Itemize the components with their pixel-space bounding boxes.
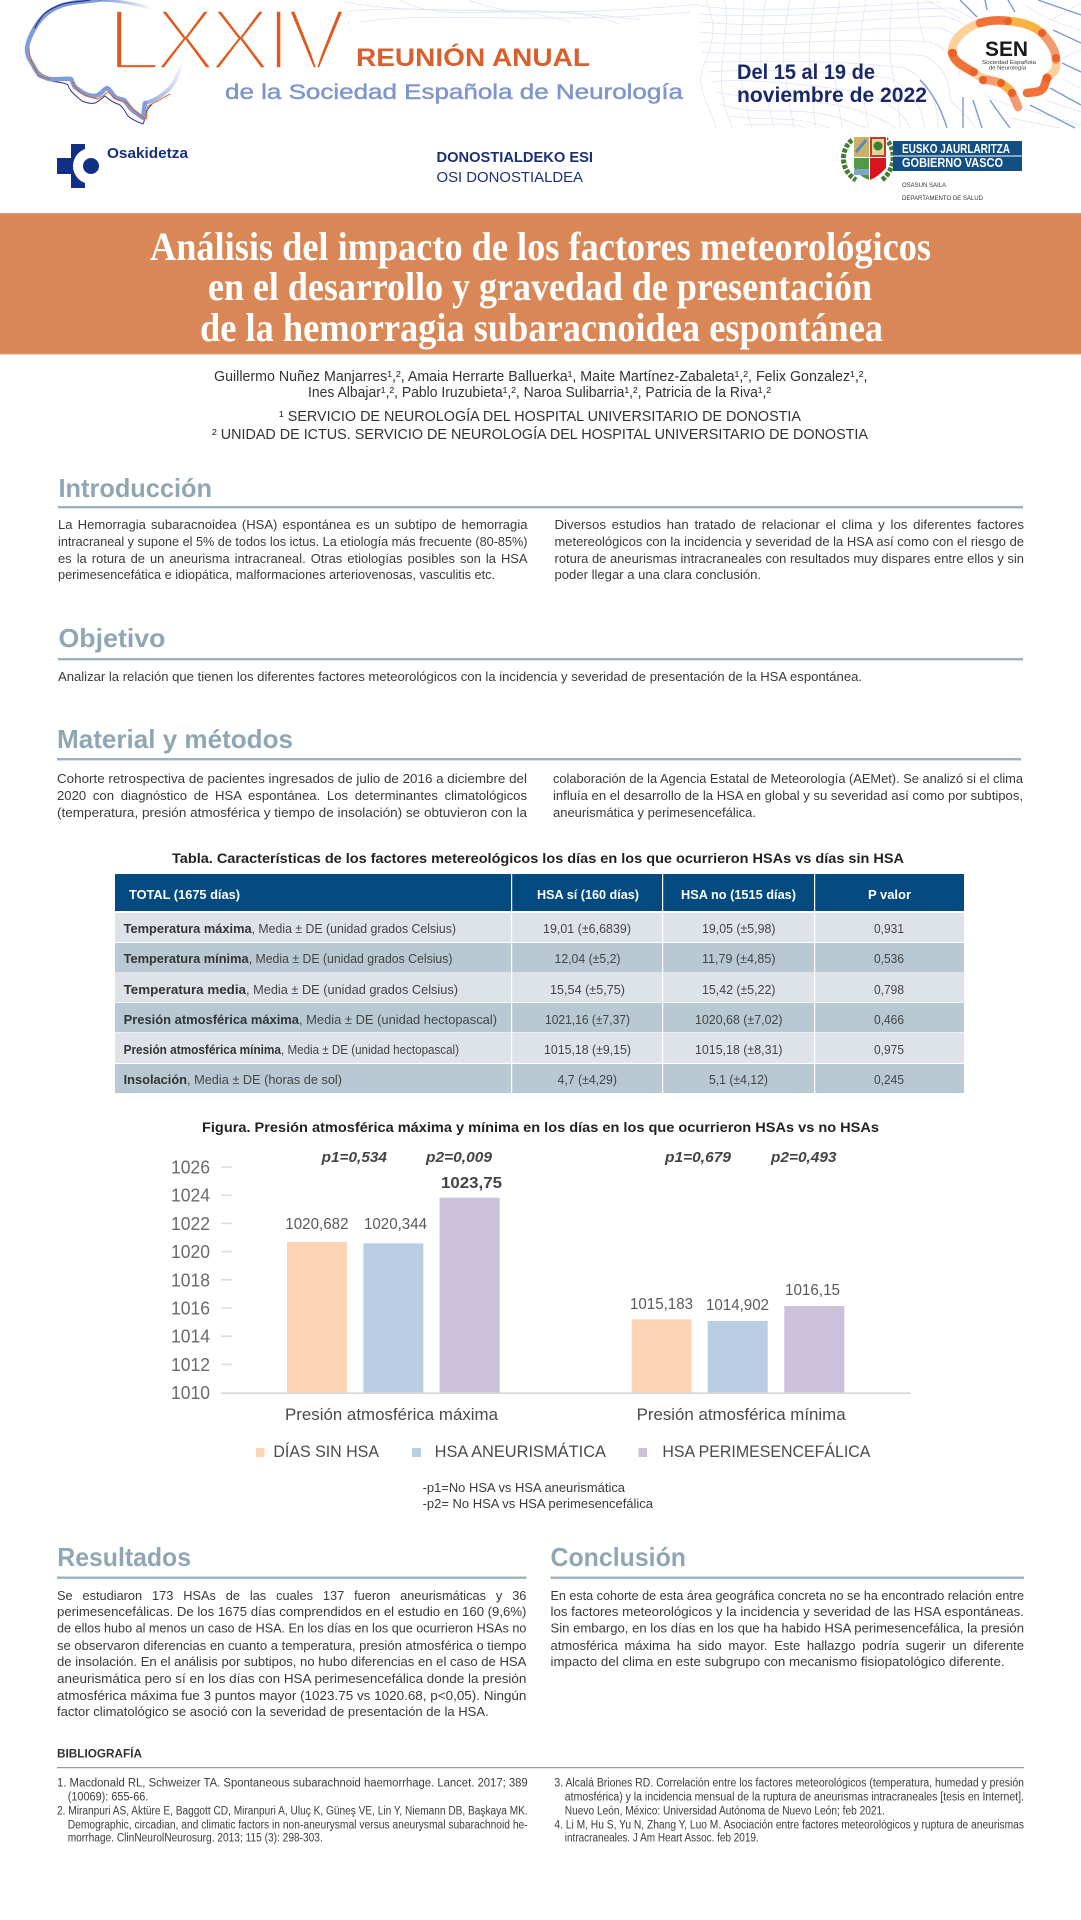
bars: presión mínima: 1015,183 bbox=[630, 1296, 693, 1313]
table row: temperatura media: , Media ± DE (unidad grados Celsius) bbox=[246, 983, 458, 997]
panel: introducción: Introducción bbox=[58, 473, 212, 503]
table header row bbox=[115, 874, 964, 911]
y axis: 1024 bbox=[171, 1186, 210, 1206]
panel: conclusión: Sin embargo, en los días en los que ha habido HSA perimesencefálica, la presión bbox=[550, 1621, 1024, 1636]
panel: conclusión: atmosférica máxima ha sido mayor. Este hallazgo podría sugerir un diferente bbox=[550, 1638, 1024, 1653]
table row: temperatura media: 15,42 (±5,22) bbox=[702, 983, 776, 997]
panel: resultados: atmosférica máxima fue 3 puntos mayor (1023.75 vs 1020.68, p<0,05). Ningún bbox=[57, 1688, 526, 1703]
table header row: HSA no (1515 días) bbox=[681, 888, 796, 902]
logo row bbox=[57, 136, 1022, 202]
bars: presión mínima: 1016,15 bbox=[785, 1282, 840, 1299]
table row: temperatura máxima bbox=[115, 913, 964, 942]
panel: conclusión: Conclusión bbox=[550, 1542, 686, 1572]
logo: SEN: Sociedad Española bbox=[982, 60, 1037, 66]
table row: temperatura mínima: 0,536 bbox=[874, 952, 904, 966]
bars: presión máxima: 1020,344 bbox=[364, 1216, 427, 1233]
panel: resultados: se observaron diferencias en cuanto a temperatura, presión atmosférica o tiempo bbox=[57, 1638, 526, 1653]
authors and affiliations: Guillermo Nuñez Manjarres¹,², Amaia Herrarte Balluerka¹, Maite Martínez-Zabaleta¹,², Felix Gonzalez¹,², bbox=[214, 369, 868, 385]
panel: material y métodos: colaboración de la Agencia Estatal de Meteorología (AEMet). Se analizó si el clima bbox=[553, 771, 1024, 786]
y axis: 1012 bbox=[171, 1355, 210, 1375]
table row: presión máxima: 1020,68 (±7,02) bbox=[695, 1013, 782, 1027]
logo: Gobierno Vasco: DEPARTAMENTO DE SALUD bbox=[902, 195, 983, 202]
panel: bibliografía: (10069): 655-66. bbox=[68, 1792, 148, 1804]
panel: resultados: de insolación. En el análisis por subtipos, no hubo diferencias en el caso de HSA bbox=[57, 1654, 527, 1669]
y axis bbox=[171, 1158, 232, 1403]
table row: presión máxima: 1021,16 (±7,37) bbox=[545, 1013, 630, 1027]
table bbox=[115, 851, 964, 1093]
logo: Osakidetza bbox=[57, 144, 189, 188]
table row: temperatura mínima bbox=[115, 943, 964, 972]
title band: en el desarrollo y gravedad de presentación bbox=[208, 264, 872, 309]
p values bbox=[321, 1149, 837, 1166]
panel: bibliografía: Nuevo León, México: Universidad Autónoma de Nuevo León; feb 2021. bbox=[565, 1806, 885, 1818]
table row: temperatura mínima: 11,79 (±4,85) bbox=[702, 952, 776, 966]
table row: temperatura mínima: Temperatura mínima bbox=[124, 952, 250, 966]
logo: SEN: SEN bbox=[985, 38, 1028, 61]
legend: HSA PERIMESENCEFÁLICA bbox=[662, 1442, 871, 1461]
panel: resultados: Resultados bbox=[57, 1542, 191, 1572]
logo: Osakidetza: Osakidetza bbox=[107, 145, 189, 162]
icon: brain outline bbox=[27, 0, 182, 124]
panel: resultados: perimesencefálicas. De los 1675 días comprendidos en el estudio en 160 (9,6%) bbox=[57, 1604, 526, 1619]
panel: material y métodos: Cohorte retrospectiva de pacientes ingresados de julio de 2016 a diciembre del bbox=[57, 771, 527, 786]
event number LXXIV bbox=[106, 0, 346, 89]
panel: introducción: es la rotura de un aneurisma intracraneal. Otras etiologías posibles son la HSA bbox=[58, 551, 528, 566]
panel: material y métodos: Material y métodos bbox=[57, 724, 293, 754]
title band: Análisis del impacto de los factores meteorológicos bbox=[150, 224, 931, 269]
table row: temperatura media: 15,54 (±5,75) bbox=[550, 983, 625, 997]
panel: bibliografía: BIBLIOGRAFÍA bbox=[57, 1748, 142, 1761]
bars: presión mínima: 1014,902 bbox=[706, 1297, 769, 1314]
y axis: 1016 bbox=[171, 1298, 210, 1318]
title band: de la hemorragia subaracnoidea espontánea bbox=[200, 305, 883, 350]
panel: introducción: metereológicos con la incidencia y severidad de la HSA así como con el riesgo de bbox=[554, 534, 1024, 549]
table row: presión máxima: 0,466 bbox=[874, 1013, 904, 1027]
logo: Donostialdeko ESI: DONOSTIALDEKO ESI bbox=[436, 149, 593, 166]
figure title: Figura. Presión atmosférica máxima y mínima en los días en los que ocurrieron HSAs vs no HSAs bbox=[202, 1120, 879, 1135]
panel: material y métodos bbox=[57, 724, 1024, 820]
y axis: 1014 bbox=[171, 1327, 210, 1347]
panel: objetivo bbox=[58, 623, 1023, 684]
y axis: 1018 bbox=[171, 1270, 210, 1290]
event dates: noviembre de 2022 bbox=[737, 84, 927, 107]
title band bbox=[0, 213, 1081, 354]
panel: bibliografía bbox=[57, 1748, 1024, 1845]
panel: bibliografía: intracraneales. J Am Heart Assoc. feb 2019. bbox=[565, 1833, 759, 1845]
panel: introducción: rotura de aneurismas intracraneales con resultados muy dispares entre ellos y sin bbox=[554, 551, 1024, 566]
table row: presión mínima: 1015,18 (±8,31) bbox=[695, 1043, 782, 1057]
panel: bibliografía: 4. Li M, Hu S, Yu N, Zhang Y, Luo M. Asociación entre factores meteorológicos y ruptura de aneurismas bbox=[554, 1820, 1024, 1832]
header banner bbox=[27, 0, 1081, 128]
p values: p2=0,009 bbox=[425, 1149, 493, 1166]
p values: p2=0,493 bbox=[770, 1149, 837, 1166]
table row: presión máxima bbox=[115, 1003, 964, 1032]
panel: introducción: Diversos estudios han tratado de relacionar el clima y los diferentes factores bbox=[554, 517, 1025, 532]
table header row: P valor bbox=[868, 888, 911, 902]
panel: resultados: aneurismática pero sí en los días con HSA perimesencefálica donde la presión bbox=[57, 1671, 526, 1686]
table row: temperatura media bbox=[115, 973, 964, 1002]
logo: Donostialdeko ESI: OSI DONOSTIALDEA bbox=[436, 169, 583, 186]
heading: reunión anual: REUNIÓN ANUAL bbox=[356, 42, 590, 72]
table row: temperatura máxima: Temperatura máxima bbox=[124, 922, 253, 936]
table row: temperatura máxima: , Media ± DE (unidad grados Celsius) bbox=[252, 922, 456, 936]
y axis: 1026 bbox=[171, 1158, 210, 1178]
authors and affiliations: ¹ SERVICIO DE NEUROLOGÍA DEL HOSPITAL UNIVERSITARIO DE DONOSTIA bbox=[279, 408, 801, 425]
table row: presión mínima: 0,975 bbox=[874, 1043, 904, 1057]
legend notes bbox=[423, 1480, 654, 1511]
logo: Donostialdeko ESI bbox=[436, 149, 593, 186]
panel: objetivo: Objetivo bbox=[58, 623, 166, 653]
panel: bibliografía: 2. Miranpuri AS, Aktüre E, Baggott CD, Miranpuri A, Uluç K, Güneş VE, Lin Y, Niemann DB, Başkaya MK. bbox=[57, 1806, 528, 1818]
p values: p1=0,679 bbox=[664, 1149, 732, 1166]
panel: objetivo: Analizar la relación que tienen los diferentes factores meteorológicos con la incidencia y severidad de presentación de la HSA espontánea. bbox=[58, 669, 862, 684]
logo: Gobierno Vasco: OSASUN SAILA bbox=[902, 182, 947, 189]
table row: insolación: Insolación bbox=[124, 1073, 187, 1087]
decorative wave mesh bbox=[345, 0, 1081, 128]
table row: temperatura máxima: 19,01 (±6,6839) bbox=[543, 922, 631, 936]
table title: Tabla. Características de los factores metereológicos los días en los que ocurrieron HSAs vs días sin HSA bbox=[172, 851, 904, 866]
panel: resultados bbox=[57, 1542, 527, 1719]
table row: temperatura máxima: 0,931 bbox=[874, 922, 904, 936]
table header row: TOTAL (1675 días) bbox=[129, 888, 240, 902]
table row: insolación: 5,1 (±4,12) bbox=[709, 1073, 768, 1087]
panel: resultados: de ellos hubo al menos un caso de HSA. En los días en los que ocurrieron HSAs no bbox=[57, 1621, 526, 1636]
subheading: sociedad: de la Sociedad Española de Neurología bbox=[225, 81, 683, 104]
legend bbox=[256, 1442, 871, 1461]
panel: bibliografía: Demographic, circadian, and climatic factors in non-aneurysmal versus aneurysmal subarachnoid he- bbox=[68, 1820, 528, 1832]
table row: temperatura media: Temperatura media bbox=[124, 983, 247, 997]
logo: Gobierno Vasco: GOBIERNO VASCO bbox=[902, 156, 1003, 170]
panel: introducción: poder llegar a una clara conclusión. bbox=[554, 567, 761, 582]
y axis: 1022 bbox=[171, 1214, 210, 1234]
event dates: Del 15 al 19 de bbox=[737, 61, 875, 84]
bars: presión máxima: 1020,682 bbox=[285, 1216, 349, 1233]
legend: DÍAS SIN HSA bbox=[273, 1442, 380, 1461]
table row: temperatura máxima: 19,05 (±5,98) bbox=[702, 922, 776, 936]
panel: material y métodos: 2020 con diagnóstico de HSA espontánea. Los determinantes climatológicos bbox=[57, 788, 528, 803]
table row: presión mínima: , Media ± DE (unidad hectopascal) bbox=[281, 1043, 459, 1057]
panel: material y métodos: influía en el desarrollo de la HSA en global y su severidad así como por subtipos, bbox=[553, 788, 1023, 803]
authors and affiliations: ² UNIDAD DE ICTUS. SERVICIO DE NEUROLOGÍA DEL HOSPITAL UNIVERSITARIO DE DONOSTIA bbox=[212, 426, 868, 443]
x axis labels bbox=[285, 1405, 846, 1424]
legend notes: -p2= No HSA vs HSA perimesencefálica bbox=[423, 1496, 654, 1511]
panel: bibliografía: morrhage. ClinNeurolNeurosurg. 2013; 115 (3): 298-303. bbox=[68, 1833, 323, 1845]
logo: SEN: de Neurología bbox=[989, 66, 1027, 72]
table row: temperatura media: 0,798 bbox=[874, 983, 904, 997]
panel: bibliografía: atmosférica) y la incidencia mensual de la ruptura de aneurismas intracraneales [tesis en Internet]. bbox=[565, 1792, 1024, 1804]
y axis: 1020 bbox=[171, 1242, 210, 1262]
panel: material y métodos: (temperatura, presión atmosférica y tiempo de insolación) se obtuvieron con la bbox=[57, 805, 528, 820]
table row: presión mínima: 1015,18 (±9,15) bbox=[544, 1043, 631, 1057]
table row: presión máxima: Presión atmosférica máxima bbox=[124, 1013, 300, 1027]
table row: insolación: 4,7 (±4,29) bbox=[558, 1073, 617, 1087]
bars: presión máxima bbox=[285, 1175, 502, 1393]
table row: temperatura mínima: 12,04 (±5,2) bbox=[554, 952, 620, 966]
bars: presión mínima bbox=[630, 1282, 844, 1393]
panel: material y métodos: aneurismática y perimesencefálica. bbox=[553, 805, 756, 820]
panel: resultados: Se estudiaron 173 HSAs de las cuales 137 fueron aneurismáticas y 36 bbox=[57, 1588, 526, 1603]
table row: insolación: 0,245 bbox=[874, 1073, 904, 1087]
legend: HSA ANEURISMÁTICA bbox=[435, 1442, 607, 1461]
panel: conclusión bbox=[550, 1542, 1024, 1669]
table row: presión mínima bbox=[115, 1033, 964, 1063]
bar chart figure bbox=[171, 1120, 910, 1511]
table row: insolación bbox=[115, 1064, 964, 1093]
table row: insolación: , Media ± DE (horas de sol) bbox=[187, 1073, 342, 1087]
y axis: 1010 bbox=[171, 1383, 210, 1403]
panel: introducción: perimesencefática e idiopática, malformaciones arteriovenosas, vasculitis etc. bbox=[58, 567, 495, 582]
table row: presión máxima: , Media ± DE (unidad hectopascal) bbox=[299, 1013, 497, 1027]
logo: Gobierno Vasco bbox=[843, 136, 1022, 202]
authors and affiliations: Ines Albajar¹,², Pablo Iruzubieta¹,², Naroa Sulibarria¹,², Patricia de la Riva¹,² bbox=[308, 385, 771, 401]
panel: resultados: factor climatológico se asoció con la severidad de presentación de la HSA. bbox=[57, 1704, 489, 1719]
logo: SEN bbox=[949, 17, 1060, 107]
bars: presión máxima: 1023,75 bbox=[441, 1175, 502, 1192]
p values: p1=0,534 bbox=[321, 1149, 388, 1166]
table row: temperatura mínima: , Media ± DE (unidad grados Celsius) bbox=[249, 952, 452, 966]
panel: introducción: La Hemorragia subaracnoidea (HSA) espontánea es un subtipo de hemorragia bbox=[58, 517, 528, 532]
table row: presión mínima: Presión atmosférica mínima bbox=[124, 1043, 282, 1057]
table header row: HSA sí (160 días) bbox=[537, 888, 639, 902]
logo: Gobierno Vasco: EUSKO JAURLARITZA bbox=[902, 142, 1010, 156]
panel: bibliografía: 3. Alcalá Briones RD. Correlación entre los factores meteorológicos (temperatura, humedad y presión bbox=[554, 1778, 1024, 1790]
panel: conclusión: impacto del clima en este subgrupo con mecanismo fisiopatológico diferente. bbox=[550, 1654, 1005, 1669]
panel: bibliografía: 1. Macdonald RL, Schweizer TA. Spontaneous subarachnoid haemorrhage. Lancet. 2017; 389 bbox=[57, 1778, 528, 1790]
panel: conclusión: En esta cohorte de esta área geográfica concreta no se ha encontrado relación entre bbox=[550, 1588, 1024, 1603]
x axis labels: Presión atmosférica mínima bbox=[637, 1405, 846, 1424]
event dates bbox=[737, 61, 927, 107]
authors and affiliations bbox=[212, 369, 868, 443]
panel: introducción bbox=[58, 473, 1025, 582]
panel: introducción: intracraneal y supone el 5% de todos los ictus. La etiología más frecuente (80-85%) bbox=[58, 534, 528, 549]
panel: conclusión: los factores meteorológicos y la incidencia y severidad de las HSA espontáneas. bbox=[550, 1604, 1024, 1619]
x axis labels: Presión atmosférica máxima bbox=[285, 1405, 499, 1424]
legend notes: -p1=No HSA vs HSA aneurismática bbox=[423, 1480, 626, 1495]
